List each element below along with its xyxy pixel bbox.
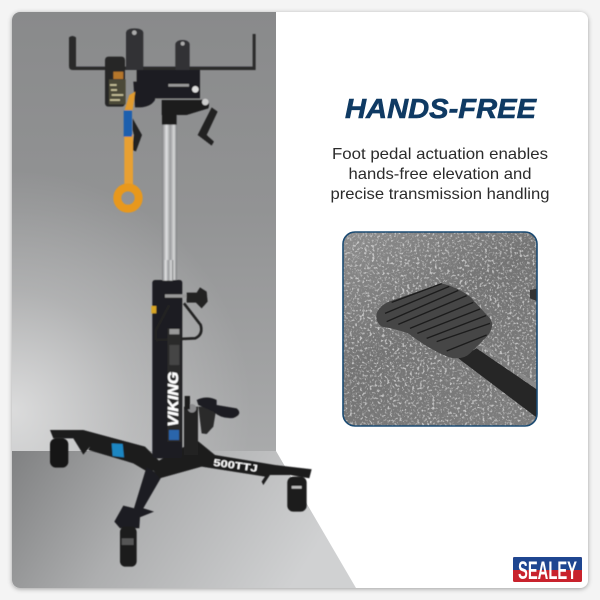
product: transmission jack [50,28,312,567]
casters [50,438,68,468]
pedal ribs [385,284,490,351]
data label on column [167,328,181,442]
model number: 500TTJ [213,458,258,475]
base, legs and casters [50,260,312,567]
lift cylinder [152,280,182,458]
leg: front [114,467,162,528]
chrome lift column [162,115,177,285]
brand name VIKING: VIKING [166,372,182,427]
rubber pedal pad [376,283,492,358]
orange ratchet strap [117,92,139,209]
logo on leg [112,443,124,457]
panel: product photo backdrop [12,12,356,588]
release handle [156,303,201,340]
leg: left [50,430,162,473]
head tray and saddle [69,28,256,151]
description text: hands-free elevation and [348,166,532,183]
leg: right [150,440,312,485]
description text: Foot pedal actuation enables [332,146,548,163]
pedal arm [480,344,536,388]
description text [330,146,550,203]
heading: HANDS-FREE [345,93,537,124]
description text: precise transmission handling [330,186,550,203]
pump and foot pedal [184,407,198,455]
photo: foot pedal close-up [343,232,540,426]
